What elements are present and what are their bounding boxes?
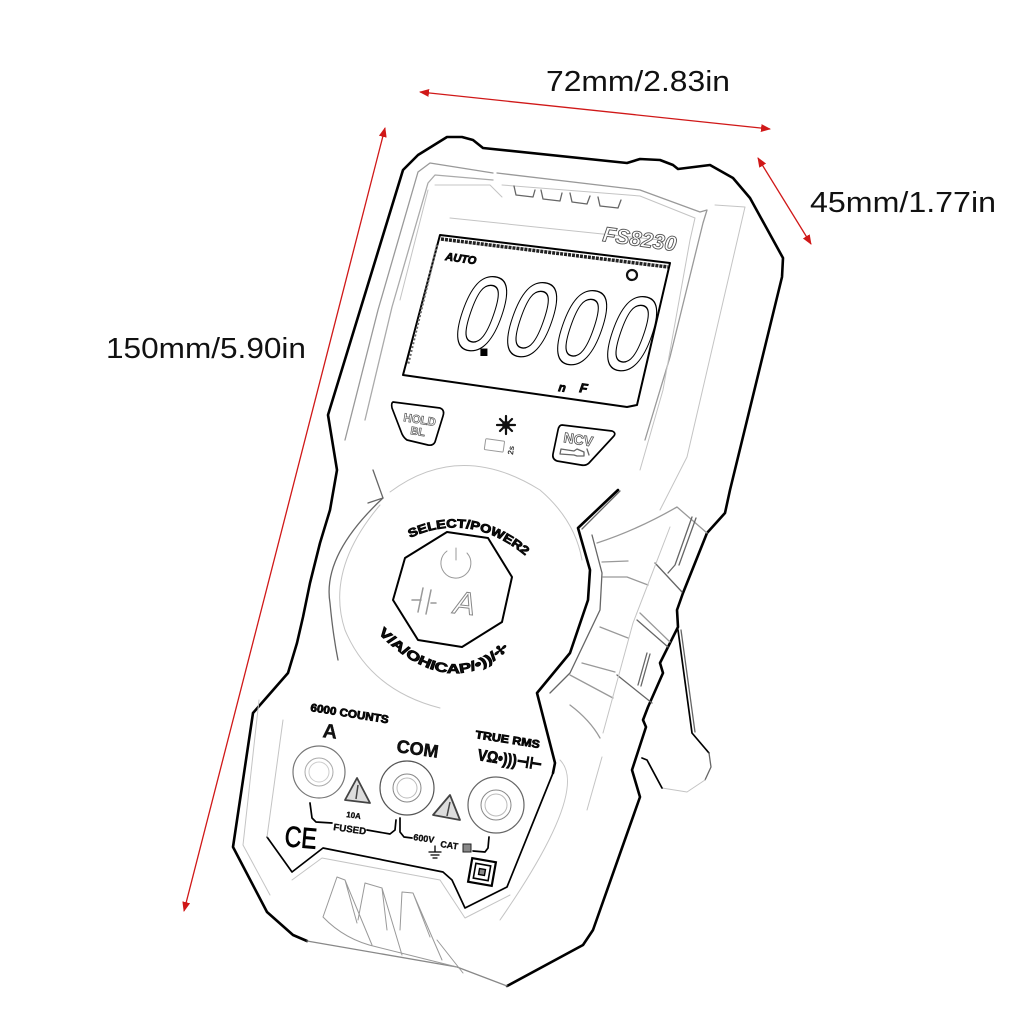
bottom ribs — [323, 877, 463, 973]
display top band — [441, 239, 668, 267]
reading digits — [440, 255, 674, 394]
dimension: height label and arrow — [106, 128, 385, 911]
dimension: height label and arrow: 150mm/5.90in — [106, 333, 306, 365]
fused label: FUSED — [333, 822, 367, 838]
COM input jack — [380, 761, 434, 815]
NCV button: NCV — [563, 429, 595, 450]
CAT label: CAT — [440, 839, 459, 852]
knob power icon — [441, 548, 471, 578]
voltage input jack — [468, 777, 524, 833]
dimension: depth label and arrow — [758, 158, 996, 244]
HOLD button — [392, 402, 444, 445]
reading digits: 0 — [590, 275, 674, 394]
backlight icon — [484, 416, 516, 455]
true RMS label: TRUE RMS — [475, 729, 541, 751]
warning triangle right — [433, 795, 460, 820]
knob A label: A — [450, 584, 477, 622]
select power label: SELECT/POWER2s — [408, 518, 530, 556]
NCV button — [553, 425, 615, 465]
outer body outline — [233, 137, 783, 986]
terminal faceplate — [243, 700, 553, 918]
indicator slots — [514, 186, 621, 208]
ground symbol — [429, 846, 441, 858]
model name: FS8230 — [601, 223, 678, 256]
reading digits: 0 — [440, 255, 524, 374]
lower body edge — [307, 941, 507, 986]
knob capacitor symbol — [412, 588, 436, 614]
kickstand — [642, 630, 711, 792]
reading digits: 0 — [490, 261, 574, 380]
CE mark: CE — [283, 821, 318, 856]
LCD display — [403, 235, 674, 407]
reading digits: . — [477, 311, 491, 367]
category square — [463, 844, 471, 852]
auto power-off icon — [627, 270, 637, 280]
double insulation square — [468, 858, 496, 886]
warning triangle left — [345, 778, 370, 803]
HOLD button: HOLD — [403, 412, 437, 429]
dimension: width label and arrow: 72mm/2.83in — [546, 66, 730, 98]
right recess black edge — [537, 490, 618, 773]
voltage ohm label: VΩ•)))⊣⊢ — [476, 747, 543, 774]
dimension: depth label and arrow: 45mm/1.77in — [810, 187, 996, 219]
fused bracket lines — [310, 803, 489, 852]
counts label: 6000 COUNTS — [310, 702, 389, 726]
selector dial panel — [328, 465, 621, 774]
auto indicator: AUTO — [444, 251, 477, 267]
fused rating label: 10A — [346, 810, 362, 821]
right side grip — [500, 507, 707, 920]
body fill — [233, 137, 783, 986]
A input jack — [293, 746, 345, 798]
HOLD button: BL — [410, 425, 426, 439]
dimension: width label and arrow — [420, 66, 770, 129]
backlight icon: 2s — [506, 445, 516, 455]
LCD display: F — [579, 380, 590, 396]
COM jack label: COM — [395, 736, 440, 762]
function label: V/A/OHICAP/•))/✢ — [380, 626, 506, 674]
unit indicators: n — [558, 380, 567, 395]
faceplate top bezel — [345, 163, 745, 510]
A jack label: A — [322, 720, 338, 744]
multimeter device — [232, 136, 784, 988]
reading digits: 0 — [540, 269, 624, 388]
600V label: 600V — [413, 832, 435, 845]
knob octagon — [393, 532, 512, 647]
